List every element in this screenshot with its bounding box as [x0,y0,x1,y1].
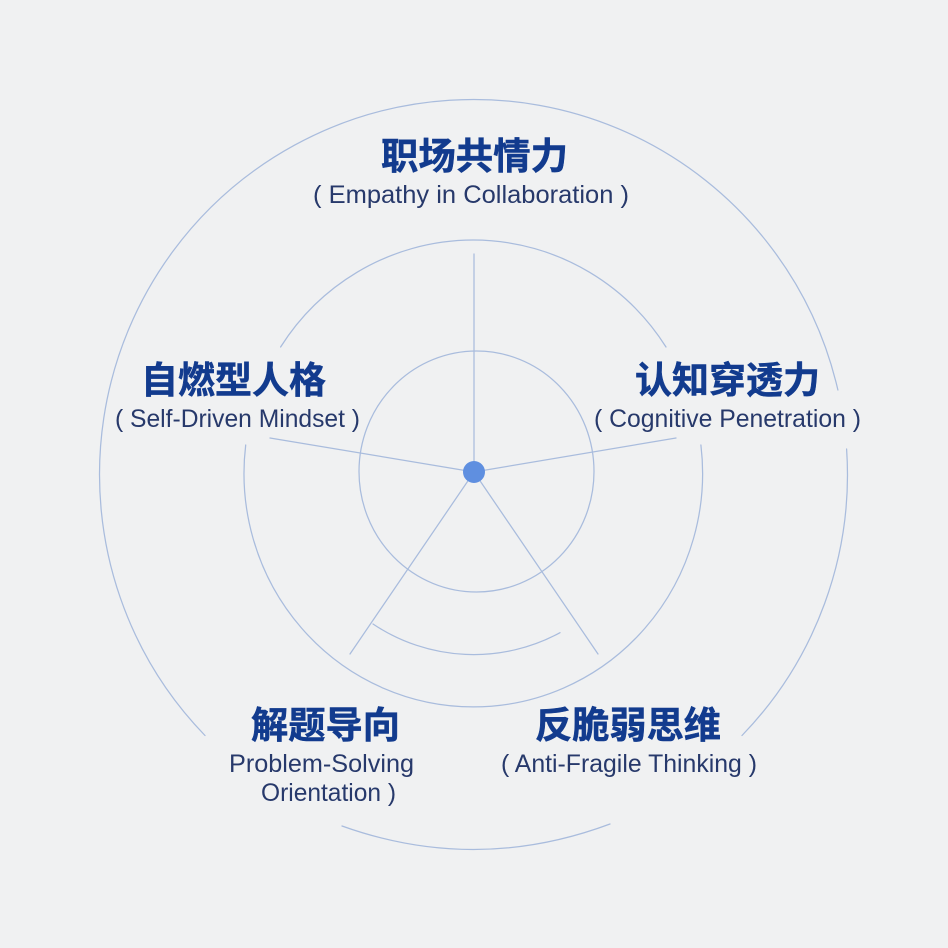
label: problem-solving orientation [229,705,414,807]
concentric rings [100,99,847,850]
label: empathy in collaboration: 职场共情力 [381,136,568,177]
spokes [270,254,676,654]
label: problem-solving orientation: Orientation ) [261,779,396,807]
center dot [463,461,485,483]
label: self-driven mindset [115,360,360,433]
label: self-driven mindset: ( Self-Driven Mindset ) [115,405,360,433]
label: problem-solving orientation: Problem-Solving [229,750,414,778]
label: empathy in collaboration [313,136,629,209]
label: anti-fragile thinking: 反脆弱思维 [535,705,721,746]
label: cognitive penetration: ( Cognitive Penetration ) [594,405,861,433]
label: cognitive penetration: 认知穿透力 [635,360,820,401]
label: empathy in collaboration: ( Empathy in Collaboration ) [313,181,629,209]
label: problem-solving orientation: 解题导向 [251,705,400,746]
label: cognitive penetration [594,360,861,433]
label: anti-fragile thinking [501,705,757,778]
label: anti-fragile thinking: ( Anti-Fragile Thinking ) [501,750,757,778]
label: self-driven mindset: 自燃型人格 [141,360,326,401]
